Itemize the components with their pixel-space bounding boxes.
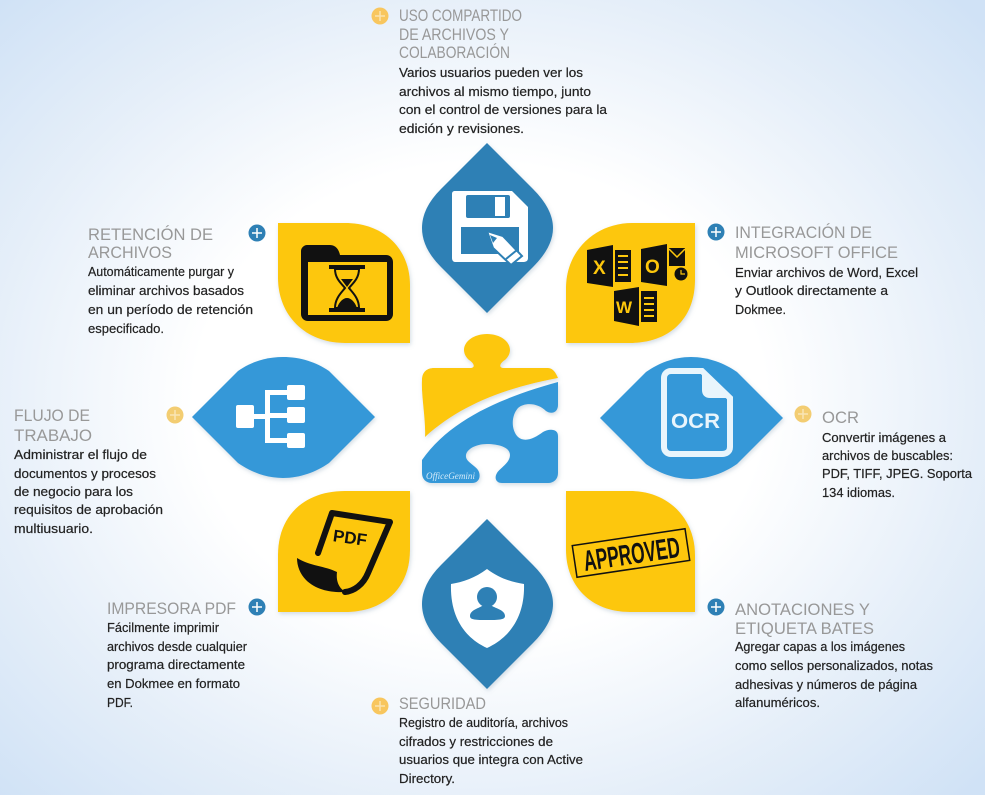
text block: workflow: requisitos de aprobación (14, 503, 163, 517)
icon: plus bullet top (372, 8, 388, 24)
text block: PDF printer: PDF. (107, 696, 133, 710)
icon: Office apps (587, 244, 688, 326)
text block: annotations and Bates stamps: como sellos personalizados, notas (735, 659, 933, 673)
puzzle blue piece (422, 382, 558, 483)
blue drop (600, 357, 783, 479)
panel: top blue drop with floppy icon (422, 143, 553, 313)
icon: Office apps: X (593, 258, 606, 279)
icon: shield with user (451, 569, 524, 648)
blue drop (422, 519, 553, 689)
text block: Microsoft Office integration: Dokmee. (735, 303, 786, 317)
text block: OCR: archivos de buscables: (822, 449, 953, 463)
text block: file sharing: con el control de versiones para la (399, 103, 607, 117)
text block: file retention: RETENCIÓN DE (88, 225, 213, 244)
text block: file sharing: edición y revisiones. (399, 122, 524, 136)
text block: PDF printer (107, 600, 247, 710)
text block: Microsoft Office integration: MICROSOFT OFFICE (735, 244, 898, 262)
yellow leaf (278, 223, 410, 343)
icon: OCR document (664, 371, 730, 454)
text block: Microsoft Office integration: y Outlook directamente a (735, 284, 888, 298)
text block: PDF printer: IMPRESORA PDF (107, 600, 236, 618)
icon: Office apps: W (616, 298, 633, 317)
text block: file retention: eliminar archivos basados (88, 284, 244, 298)
text block: file sharing: USO COMPARTIDO (399, 7, 522, 25)
text block: OCR: OCR (822, 409, 859, 427)
text block: annotations and Bates stamps: ANOTACIONES Y (735, 601, 870, 619)
panel: bottom blue drop security (422, 519, 553, 689)
text block: workflow: Administrar el flujo de (14, 448, 147, 462)
icon: plus bullet OCR (794, 406, 812, 422)
panel: yellow leaf Microsoft Office (566, 223, 695, 343)
yellow leaf (566, 223, 695, 343)
text block: Microsoft Office integration (735, 223, 918, 317)
icon: PDF scroll: PDF (332, 526, 368, 550)
icon: plus bullet retention (248, 224, 266, 242)
text block: file retention (88, 225, 253, 336)
text block: security: usuarios que integra con Active (399, 753, 583, 767)
text block: workflow (14, 407, 163, 536)
text block: file retention: especificado. (88, 322, 164, 336)
icon: approved stamp: APPROVED (581, 532, 682, 578)
text block: annotations and Bates stamps: ETIQUETA BATES (735, 620, 874, 638)
text block: workflow: FLUJO DE (14, 407, 90, 425)
text block: OCR: 134 idiomas. (822, 486, 895, 500)
panel: yellow leaf retention (278, 223, 410, 343)
text block: file retention: en un período de retención (88, 303, 253, 317)
icon: plus bullet security (372, 698, 388, 714)
text block: security: SEGURIDAD (399, 695, 486, 713)
panel: blue drop OCR (600, 357, 783, 479)
text block: PDF printer: en Dokmee en formato (107, 677, 240, 691)
panel: yellow leaf approved (566, 491, 695, 612)
panel: central puzzle logo (422, 334, 558, 483)
text block: file sharing: DE ARCHIVOS Y (399, 26, 509, 44)
logo wordmark: OfficeGemini (426, 471, 475, 482)
text block: workflow: TRABAJO (14, 427, 92, 445)
icon: folder with hourglass (301, 245, 393, 321)
puzzle yellow piece (422, 334, 558, 437)
icon: workflow tree (236, 385, 305, 448)
text block: workflow: de negocio para los (14, 485, 133, 499)
blue drop (192, 357, 375, 478)
text block: annotations and Bates stamps: alfanuméricos. (735, 696, 820, 710)
text block: annotations and Bates stamps (735, 601, 933, 710)
text block: annotations and Bates stamps: adhesivas y números de página (735, 678, 917, 692)
text block: file sharing (399, 7, 607, 136)
icon: OCR document: OCR (671, 410, 720, 433)
icon: plus bullet office (708, 224, 724, 240)
text block: OCR (822, 409, 972, 500)
text block: annotations and Bates stamps: Agregar capas a los imágenes (735, 640, 905, 654)
yellow leaf (566, 491, 695, 612)
yellow leaf (278, 491, 410, 612)
text block: security (399, 695, 583, 786)
text block: Microsoft Office integration: INTEGRACIÓN DE (735, 223, 872, 242)
blue drop (422, 143, 553, 313)
text block: security: cifrados y restricciones de (399, 735, 553, 749)
text block: security: Registro de auditoría, archivos (399, 716, 568, 730)
text block: Microsoft Office integration: Enviar archivos de Word, Excel (735, 266, 918, 280)
text block: PDF printer: archivos desde cualquier (107, 640, 247, 654)
icon: plus bullet workflow (166, 406, 184, 424)
text block: PDF printer: Fácilmente imprimir (107, 621, 219, 635)
text block: file sharing: Varios usuarios pueden ver los (399, 66, 583, 80)
text block: file sharing: COLABORACIÓN (399, 43, 510, 62)
text block: PDF printer: programa directamente (107, 658, 245, 672)
text block: OCR: Convertir imágenes a (822, 431, 946, 445)
icon: plus bullet annotations (708, 598, 724, 616)
icon: Office apps: O (645, 257, 660, 278)
icon: plus bullet PDF (248, 598, 266, 616)
panel: blue drop workflow (192, 357, 375, 478)
text block: workflow: multiusuario. (14, 522, 93, 536)
text block: file sharing: archivos al mismo tiempo, junto (399, 85, 591, 99)
text block: file retention: ARCHIVOS (88, 244, 172, 262)
panel: yellow leaf PDF (278, 491, 410, 612)
text block: security: Directory. (399, 772, 455, 786)
text block: OCR: PDF, TIFF, JPEG. Soporta (822, 467, 972, 481)
text block: file retention: Automáticamente purgar y (88, 265, 235, 279)
text block: workflow: documentos y procesos (14, 467, 156, 481)
icon: floppy disk with pencil (452, 191, 528, 265)
